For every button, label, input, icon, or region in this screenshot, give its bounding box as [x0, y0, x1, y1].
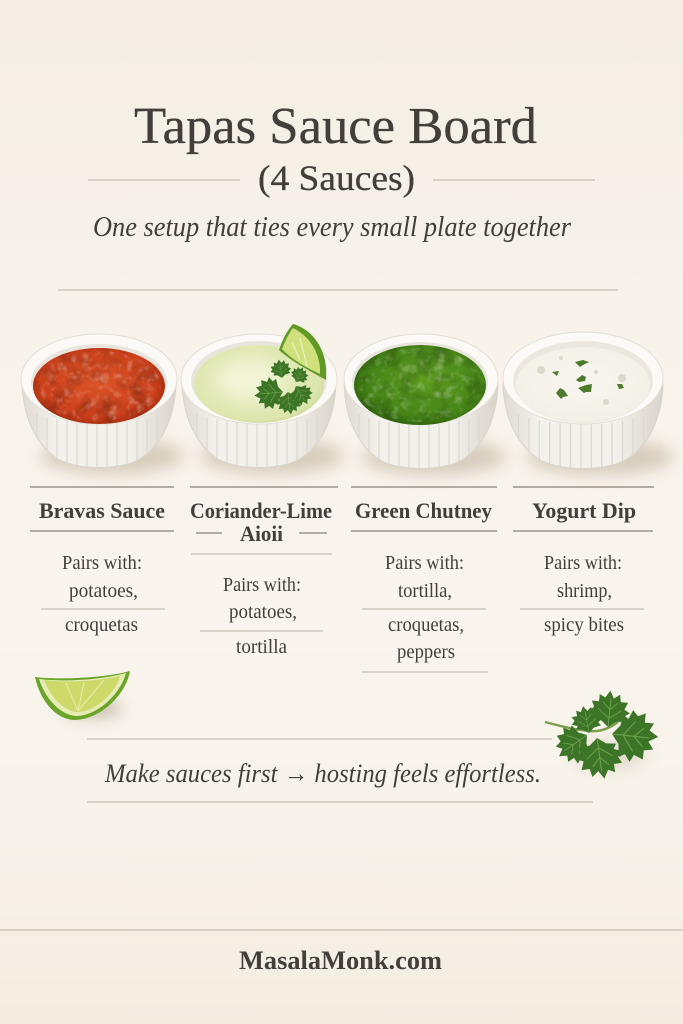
- column: yogurt dip: [513, 487, 654, 636]
- column: yogurt dip: Yogurt Dip: [532, 498, 636, 523]
- column: bravas sauce: [30, 487, 174, 636]
- closing line with rules: Make sauces first → hosting feels effortless.: [104, 759, 541, 788]
- column: green chutney: [351, 487, 497, 672]
- column: yogurt dip: spicy bites: [544, 614, 624, 636]
- column: coriander-lime aioli: [190, 487, 338, 658]
- column: green chutney: Pairs with:: [385, 552, 464, 574]
- footer: website: MasalaMonk.com: [239, 946, 442, 975]
- title: Tapas Sauce Board: [134, 98, 537, 155]
- column: green chutney: peppers: [397, 641, 455, 663]
- column: yogurt dip: shrimp,: [557, 580, 612, 602]
- column: bravas sauce: potatoes,: [69, 580, 138, 602]
- column: coriander-lime aioli: potatoes,: [229, 601, 297, 623]
- herb flecks: [552, 360, 624, 399]
- column: yogurt dip: Pairs with:: [544, 552, 622, 574]
- lime slice garnish: [279, 324, 326, 380]
- column: bravas sauce: Bravas Sauce: [39, 498, 165, 523]
- column: coriander-lime aioli: tortilla: [236, 636, 287, 658]
- subtitle: 4 sauces with flanking rules: (4 Sauces): [258, 158, 415, 198]
- bowl: yogurt dip: [503, 332, 663, 477]
- bowl: bravas sauce: [21, 334, 177, 476]
- column: green chutney: Green Chutney: [355, 498, 492, 523]
- column: coriander-lime aioli: Aioii: [240, 521, 283, 546]
- coriander garnish: [253, 358, 317, 416]
- icon: lime wedge: [35, 671, 130, 720]
- column: bravas sauce: croquetas: [65, 614, 138, 636]
- column: bravas sauce: Pairs with:: [62, 552, 142, 574]
- column: coriander-lime aioli: Coriander-Lime: [190, 498, 332, 523]
- bowl shadows: [40, 438, 674, 475]
- column: green chutney: croquetas,: [388, 614, 464, 636]
- tagline: One setup that ties every small plate together: [93, 212, 571, 243]
- icon: coriander sprig: [545, 689, 661, 782]
- bowl: coriander-lime aioli: [181, 324, 337, 476]
- column: coriander-lime aioli: Pairs with:: [223, 574, 301, 596]
- column: green chutney: tortilla,: [398, 580, 452, 602]
- bowl: green chutney: [344, 334, 498, 477]
